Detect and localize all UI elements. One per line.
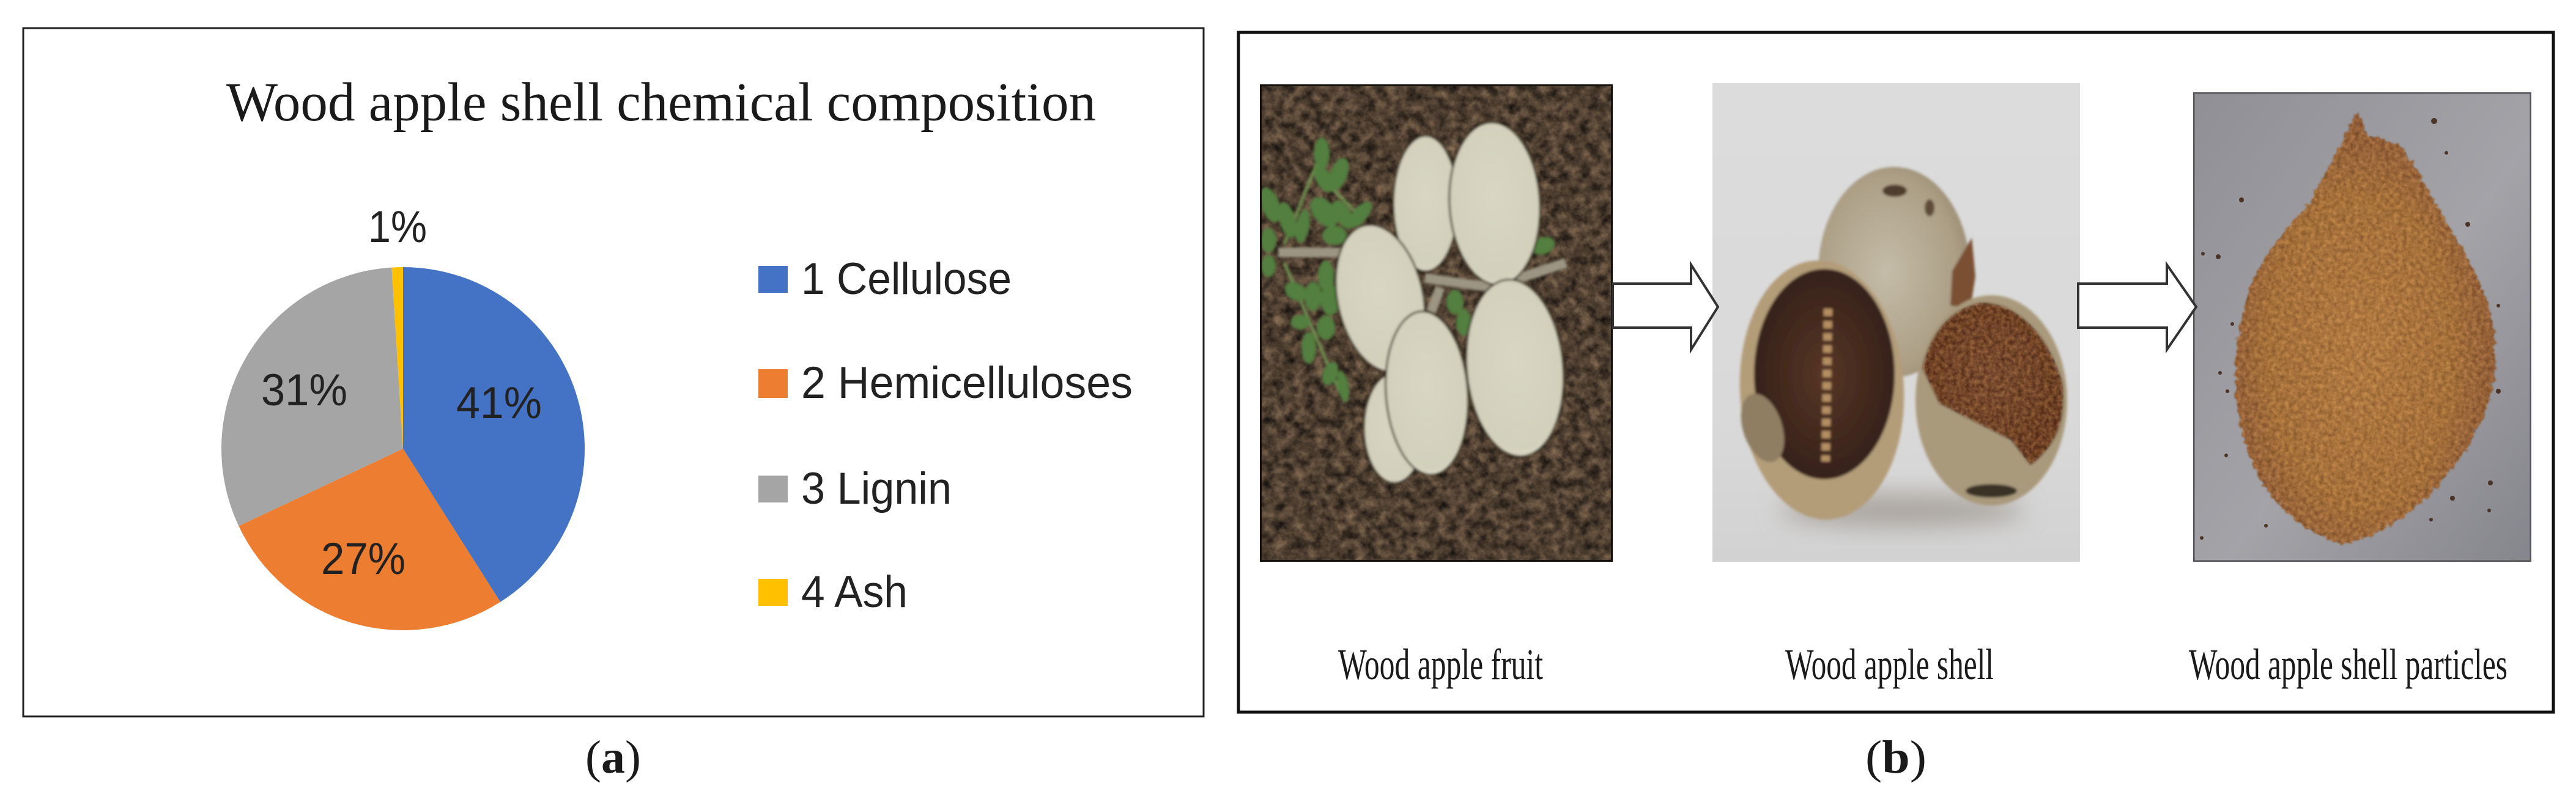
scattered specks [2200,118,2501,540]
branches [1278,252,1566,312]
shadow under shells [1780,495,2024,526]
panel a: pie chart [23,28,1204,716]
pie chart [221,267,585,630]
fruits [1323,120,1571,483]
powder grain [2235,112,2495,544]
photo: wood apple shell [1712,83,2080,562]
mottling on shell interiors [1922,303,2063,465]
legend swatch ash [758,579,788,606]
legend swatch hemicelluloses [758,369,788,398]
legend label hemicelluloses: 2 Hemicelluloses [801,358,1133,408]
slice: cellulose 41% [403,267,585,602]
value label 31%: 31% [261,366,347,415]
powder heap [2235,112,2495,544]
caption (b): (b) [1865,732,1926,783]
stems [1284,153,1358,391]
chart title: Wood apple shell chemical composition [226,72,1096,133]
photo: wood apple fruit [1256,84,1613,562]
slice: hemicelluloses 27% [239,449,500,630]
arrow: fruit to shell [1613,265,1718,350]
left shell half [1733,256,1911,524]
slice: lignin 31% [221,268,403,526]
arrow: shell to particles [2078,265,2196,350]
right shell half [1949,237,1978,307]
legend [758,254,1133,617]
back shell sphere [1818,167,1970,377]
label: wood apple shell: Wood apple shell [1785,640,1994,689]
caption (a): (a) [585,732,641,783]
legend swatch lignin [758,476,788,502]
label: wood apple fruit: Wood apple fruit [1338,640,1543,689]
panel b: processing stages [1238,32,2553,712]
value label 1%: 1% [368,202,427,252]
photo: wood apple shell particles [2193,92,2531,562]
slice: ash 1% [391,267,403,449]
legend label cellulose: 1 Cellulose [801,254,1012,304]
legend label lignin: 3 Lignin [801,464,952,513]
value label 27%: 27% [321,534,405,584]
legend label ash: 4 Ash [801,567,908,617]
value label 41%: 41% [456,378,542,428]
legend swatch cellulose [758,266,788,293]
leaves [1256,138,1558,403]
